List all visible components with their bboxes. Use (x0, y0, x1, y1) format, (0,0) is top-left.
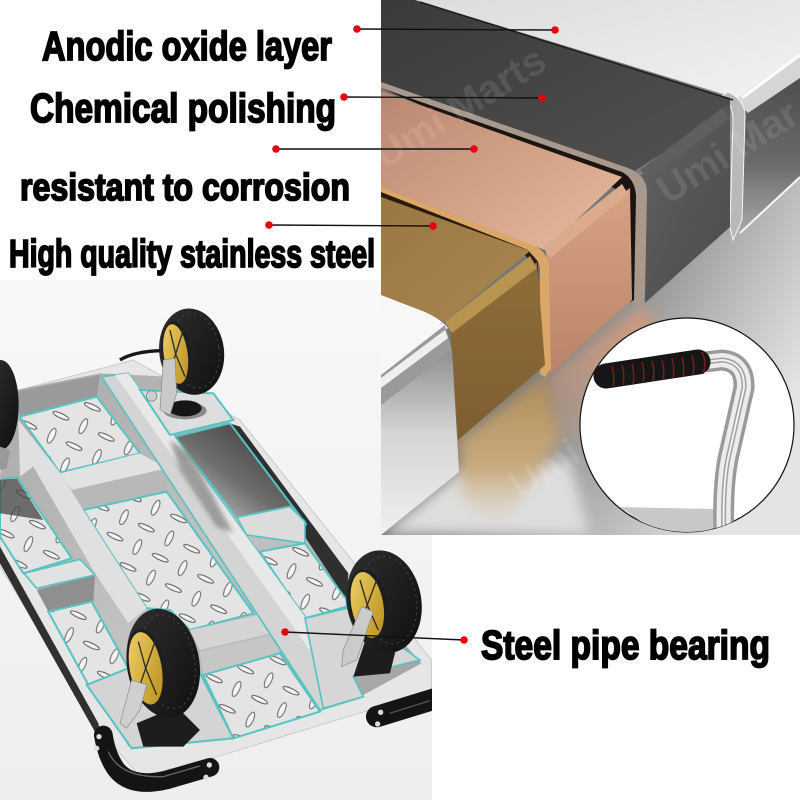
wheel: bottom left (120, 608, 200, 747)
platform edge (620, 507, 714, 532)
diamond plate: lower right (260, 543, 347, 618)
long steel pipe 1 (102, 373, 363, 710)
label: Anodic oxide layer: Anodic oxide layer (42, 23, 332, 69)
corner bumper: bottom right (375, 698, 437, 727)
callout line: anodic oxide (353, 25, 559, 34)
foam grip (606, 362, 698, 376)
wheel: far left (0, 360, 19, 470)
callout line: steel pipe (281, 628, 468, 644)
rose-gold polished layer (381, 82, 647, 375)
diamond plate: upper right (175, 423, 307, 525)
diamond plate: bottom middle (203, 653, 320, 738)
dark anodic layer (381, 0, 733, 303)
callout line: chemical polishing (340, 93, 546, 102)
floor reflection: copper (548, 305, 660, 440)
floor reflection: gold (458, 375, 560, 530)
label: resistant to corrosion: resistant to corrosion (20, 167, 350, 209)
cross bars (60, 453, 167, 490)
panel: material cross-section photo (366, 0, 800, 535)
diamond plate: centre (83, 492, 253, 630)
end plates (87, 668, 233, 748)
diamond plate: left (0, 477, 72, 573)
watermarks: Umi (501, 430, 589, 508)
wheel: right (341, 550, 422, 677)
wheel: top (146, 304, 230, 419)
long steel pipe 2 (18, 420, 147, 623)
callout line: stainless steel (265, 221, 437, 230)
silver base layer (381, 295, 459, 535)
label: High quality stainless steel: High quality stainless steel (9, 233, 375, 276)
cart frame (0, 360, 432, 777)
silver outer top surface (415, 0, 800, 100)
corner bumper: bottom left (94, 734, 212, 783)
tube (705, 360, 744, 540)
watermarks: Umi Marts (366, 38, 554, 178)
right silver end section (722, 55, 800, 240)
callout line: corrosion (272, 145, 478, 153)
top handle strip (120, 351, 160, 360)
label: Chemical polishing: Chemical polishing (30, 85, 336, 131)
diamond plate: lower left (48, 602, 128, 685)
watermarks (366, 38, 800, 508)
panel: cart underside (0, 280, 437, 800)
recessed interior (0, 373, 422, 747)
gold stainless layer (381, 187, 551, 440)
inset circle: handle detail (580, 318, 794, 540)
diamond plate: top left (20, 397, 140, 473)
lower floor lightening (381, 460, 590, 535)
